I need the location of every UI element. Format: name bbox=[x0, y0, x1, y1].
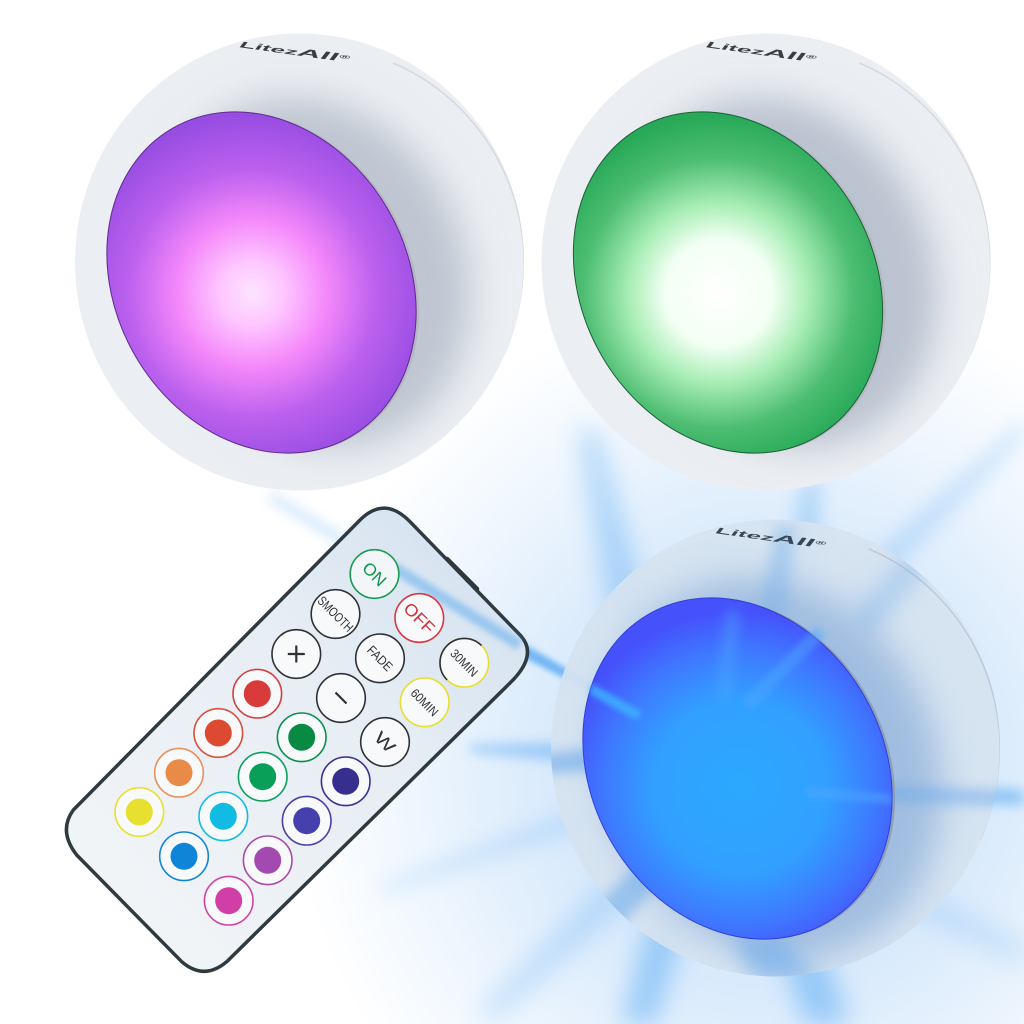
button: emerald bbox=[238, 752, 287, 801]
body bbox=[542, 34, 990, 490]
body bbox=[75, 34, 524, 490]
button: purple bbox=[243, 836, 292, 885]
button: ON bbox=[350, 550, 399, 598]
button: 30MIN bbox=[440, 638, 489, 687]
button: SMOOTH bbox=[311, 590, 360, 638]
button: SMOOTH: SMOOTH bbox=[315, 593, 356, 635]
brand logo: ® bbox=[804, 54, 818, 60]
button: 30MIN: 30MIN bbox=[447, 646, 481, 680]
button: W: W bbox=[370, 728, 399, 757]
body shading bbox=[667, 62, 990, 462]
button: orange bbox=[155, 748, 203, 797]
lens rim bbox=[516, 55, 946, 510]
lens rim bbox=[49, 55, 480, 510]
button: indigo bbox=[282, 796, 331, 845]
button: OFF bbox=[395, 594, 444, 642]
button: minus bbox=[317, 674, 365, 722]
button: FADE: FADE bbox=[364, 642, 396, 674]
button: magenta bbox=[204, 876, 253, 925]
button: yellow bbox=[115, 788, 164, 836]
remote beam overlay bbox=[390, 562, 522, 650]
button: green bbox=[277, 713, 326, 762]
remote side button bbox=[447, 559, 477, 589]
light: green bbox=[542, 34, 990, 490]
body shading bbox=[551, 521, 1000, 976]
body shading bbox=[202, 62, 524, 462]
button: 60MIN: 60MIN bbox=[408, 686, 441, 719]
remote body bbox=[66, 508, 528, 971]
button: FADE bbox=[356, 634, 404, 683]
lens beams bbox=[590, 611, 891, 804]
button: W bbox=[361, 718, 409, 766]
button: red-orange bbox=[194, 709, 243, 757]
button: red bbox=[233, 669, 282, 718]
button: ON: ON bbox=[358, 558, 390, 590]
button: cyan bbox=[199, 792, 248, 841]
button: OFF: OFF bbox=[400, 599, 438, 638]
remote control bbox=[66, 508, 528, 971]
lens bbox=[46, 55, 477, 510]
light: blue bbox=[551, 520, 1000, 976]
light: purple bbox=[75, 34, 524, 490]
brand logo: LitezAll bbox=[236, 40, 343, 63]
button: blue bbox=[160, 832, 208, 881]
body bbox=[551, 520, 1000, 976]
brand logo: ® bbox=[338, 54, 352, 60]
brand logo: LitezAll bbox=[703, 40, 809, 63]
light rays: blue beams behind lower light bbox=[268, 420, 1024, 1024]
lens bbox=[522, 541, 953, 996]
button: plus bbox=[272, 630, 321, 678]
lens rim bbox=[525, 541, 956, 996]
brand logo: LitezAll bbox=[712, 526, 819, 549]
button: navy bbox=[321, 757, 370, 806]
button: 60MIN bbox=[400, 678, 449, 727]
lens bbox=[513, 55, 943, 510]
brand logo: ® bbox=[814, 540, 828, 546]
